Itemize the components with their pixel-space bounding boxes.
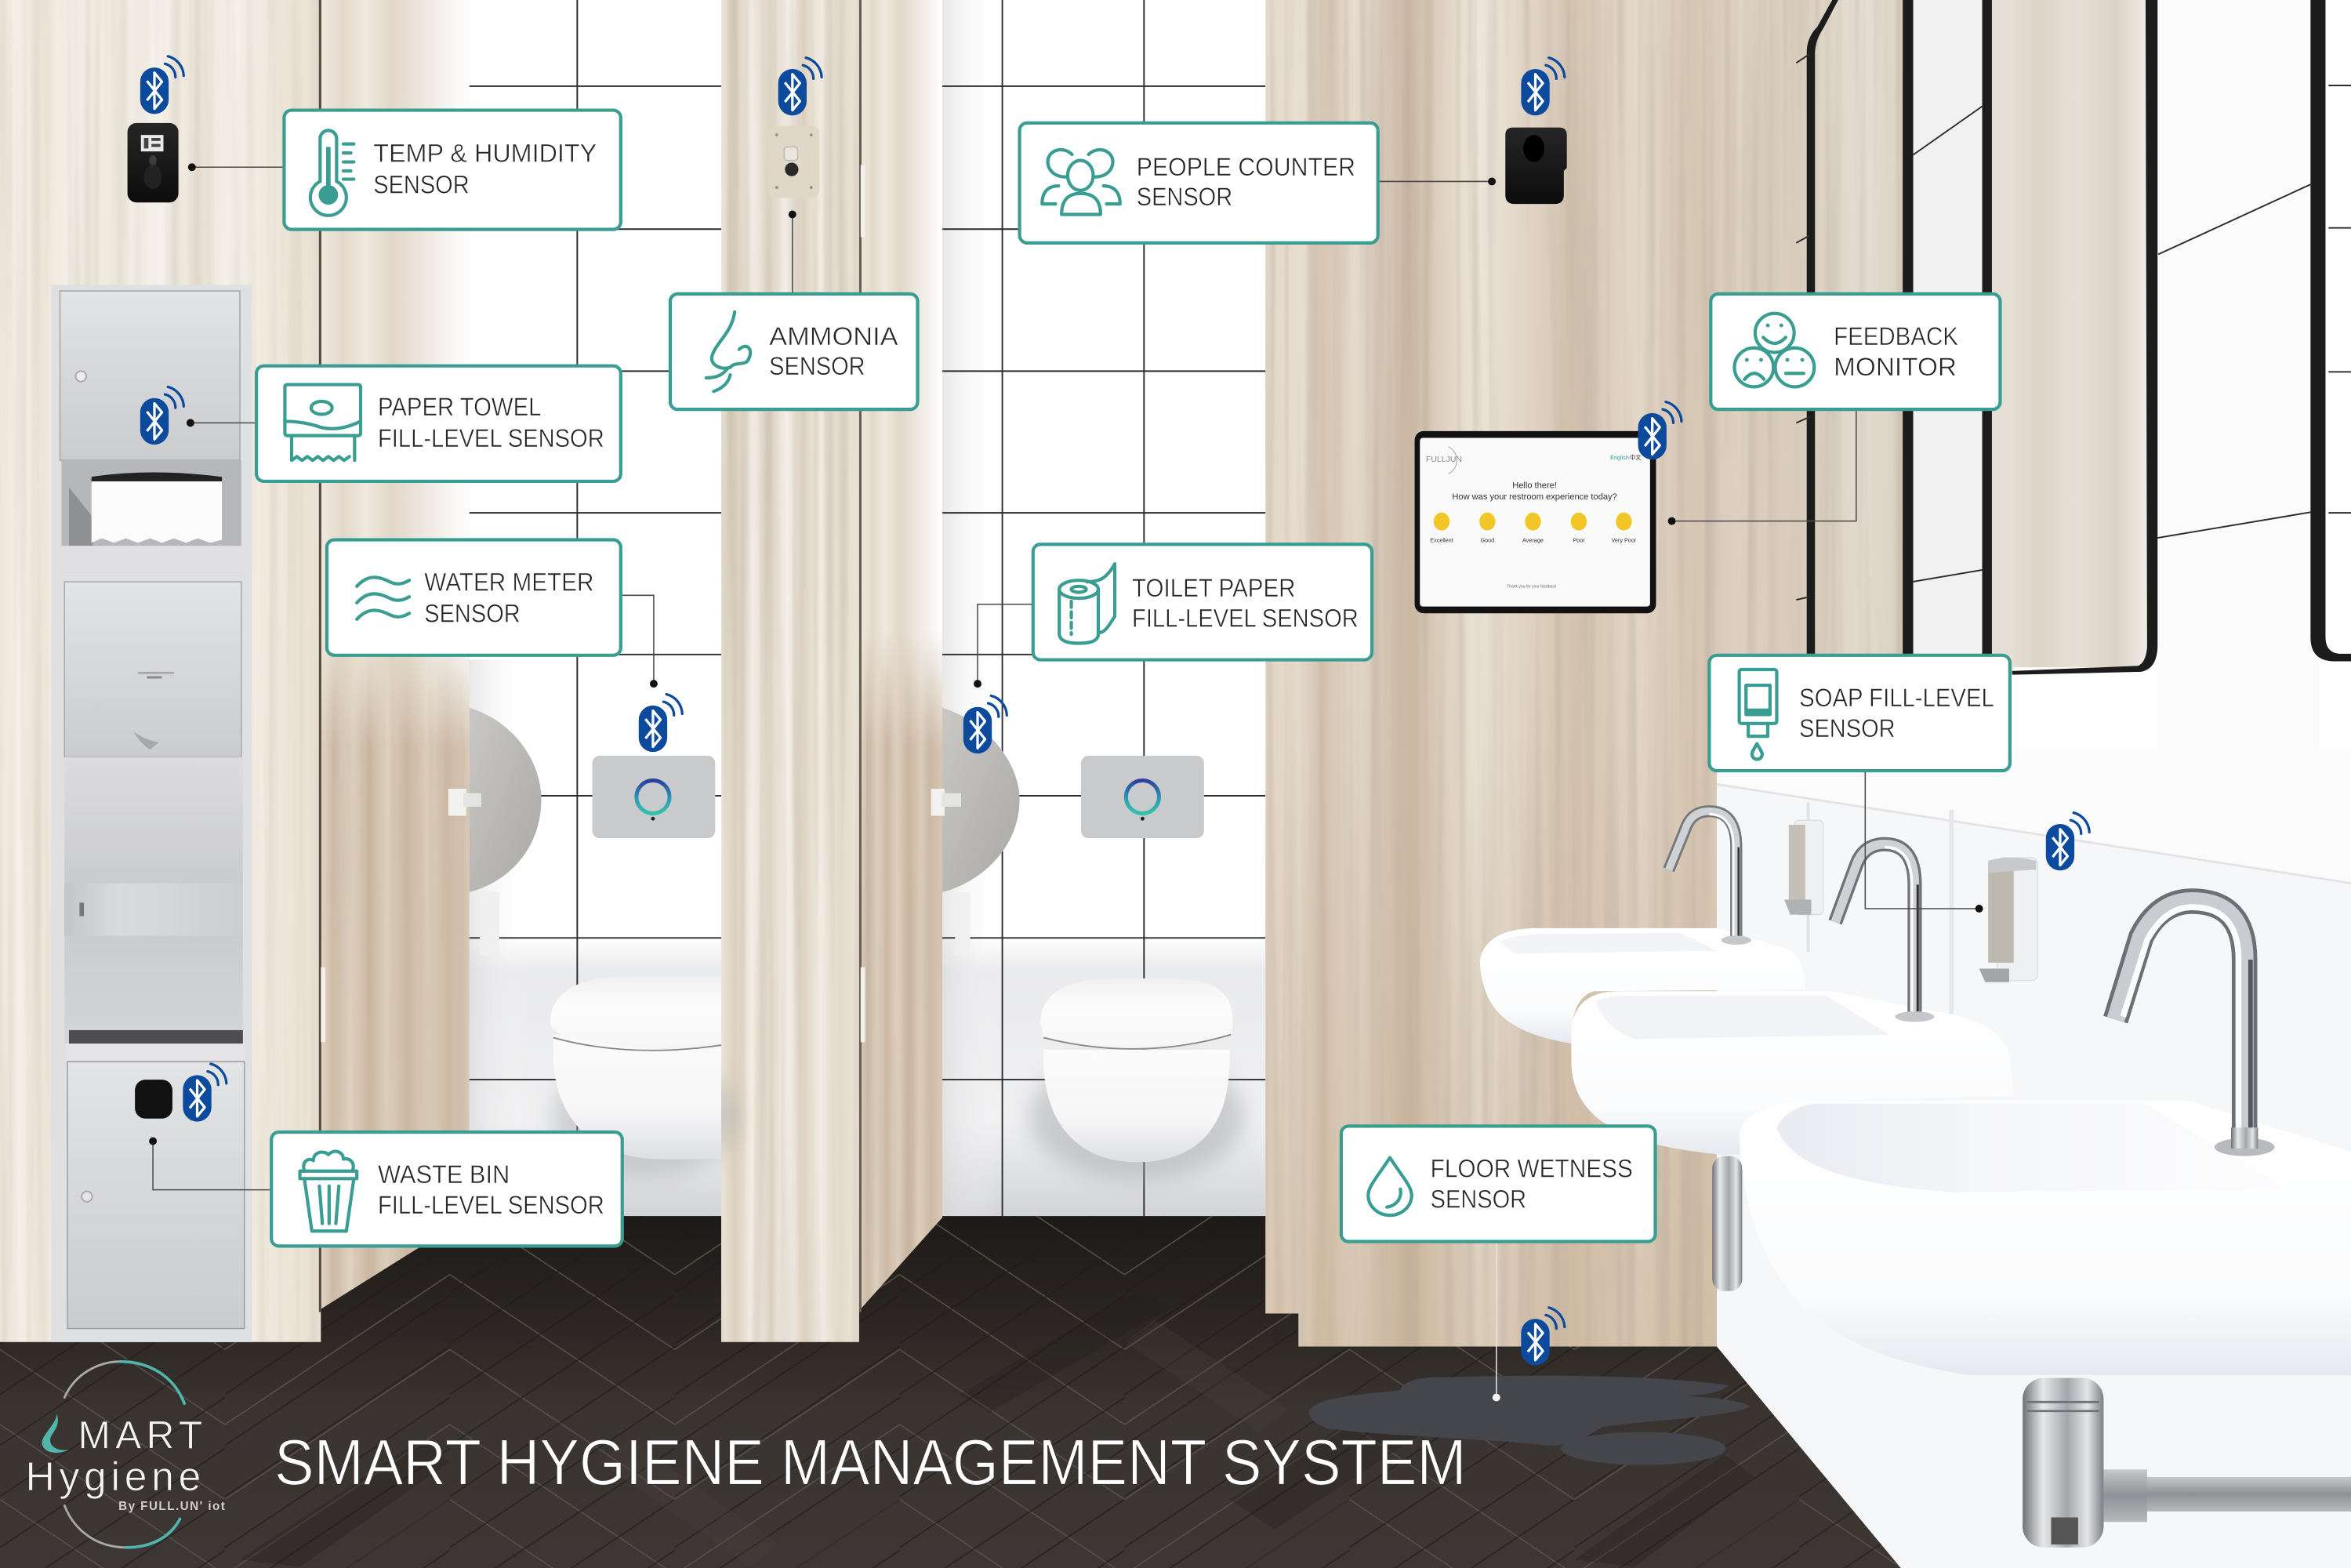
device: waste bin sensor <box>135 1080 172 1119</box>
logo ring <box>64 1362 184 1548</box>
faucet 2 <box>1835 844 1934 1022</box>
soap dispenser 1 <box>1784 820 1823 915</box>
left wood wall <box>0 0 321 1342</box>
device: people counter sensor <box>1505 128 1567 204</box>
soap dispenser 2 <box>1979 858 2037 982</box>
tablet feedback monitor: 中文 <box>1630 454 1642 461</box>
text: feedback monitor: FEEDBACK <box>1834 322 1958 350</box>
label: water meter sensor <box>327 540 621 655</box>
text: soap fill-level <box>1799 684 1994 742</box>
label: toilet paper fill-level sensor <box>1033 544 1372 660</box>
stall door 1 <box>319 0 470 1312</box>
faucet 1 <box>1669 811 1751 945</box>
tablet feedback monitor: Average <box>1522 536 1544 543</box>
text: floor wetness: FLOOR WETNESS <box>1431 1154 1633 1182</box>
icon: three faces <box>1735 314 1814 387</box>
bluetooth icon: temp sensor <box>140 56 183 114</box>
text: waste bin <box>378 1160 604 1219</box>
wall-hung toilet 1 <box>550 976 738 1177</box>
text: waste bin: FILL-LEVEL SENSOR <box>378 1191 604 1219</box>
bluetooth icon: paper towel <box>140 387 183 445</box>
text: soap fill-level: SOAP FILL-LEVEL <box>1799 684 1994 712</box>
tablet feedback monitor: Very Poor <box>1611 536 1637 543</box>
wall-hung toilet 2 <box>1029 978 1244 1180</box>
logo word Hygiene: Hygiene <box>26 1454 201 1499</box>
bluetooth icon: floor wetness <box>1521 1308 1565 1365</box>
bluetooth icon: feedback tablet <box>1638 402 1682 459</box>
icon: paper towel <box>285 385 361 460</box>
icon: water waves <box>357 577 409 619</box>
floor puddle <box>1309 1376 1750 1465</box>
logo byline: By FULL.UN' iot <box>118 1500 225 1513</box>
bluetooth icon: toilet paper <box>963 695 1007 753</box>
text: temp and humidity: SENSOR <box>373 171 470 199</box>
icon: waste bin <box>300 1152 357 1231</box>
white sink wall <box>1717 771 2351 1568</box>
bluetooth icon: waste bin <box>183 1064 227 1122</box>
text: paper towel <box>378 393 604 452</box>
label: ammonia sensor <box>670 294 918 409</box>
label: soap fill-level sensor <box>1709 655 2010 771</box>
label: floor wetness sensor <box>1341 1126 1656 1242</box>
device: temp and humidity sensor <box>128 123 179 202</box>
tablet feedback monitor: Hello there! <box>1512 481 1557 491</box>
icon: toilet paper roll <box>1059 564 1115 644</box>
text: ammonia: AMMONIA <box>769 322 898 350</box>
logo word MART: MART <box>78 1414 202 1457</box>
toilet paper dispenser 1 <box>448 708 541 955</box>
tablet feedback monitor: Excellent <box>1430 536 1453 543</box>
label: waste bin fill-level sensor <box>271 1132 622 1246</box>
sink drain pipe <box>2023 1378 2351 1548</box>
text: toilet paper: TOILET PAPER <box>1132 574 1296 602</box>
logo drop <box>42 1414 69 1453</box>
tablet feedback monitor: FULLJUN <box>1426 455 1462 464</box>
text: waste bin: WASTE BIN <box>378 1160 510 1189</box>
mirrors with black frames <box>1796 0 2351 795</box>
icon: people <box>1042 150 1120 215</box>
bluetooth icon: ammonia sensor <box>778 58 822 115</box>
front faucet <box>2116 901 2274 1156</box>
label: temp and humidity sensor <box>284 111 621 230</box>
tablet feedback monitor <box>1415 431 1656 613</box>
stall door 2 <box>859 0 942 1312</box>
icon: nose <box>706 312 750 391</box>
icon: water drop <box>1368 1158 1412 1215</box>
bluetooth icon: soap <box>2046 813 2089 870</box>
text: soap fill-level: SENSOR <box>1799 714 1896 742</box>
title: SMART HYGIENE MANAGEMENT SYSTEM <box>274 1427 1467 1498</box>
text: floor wetness <box>1431 1154 1633 1214</box>
text: water meter: WATER METER <box>424 568 593 597</box>
tablet feedback monitor: Thank you for your feedback <box>1507 585 1556 590</box>
label: people counter sensor <box>1020 123 1378 243</box>
small drain behind sinks <box>1712 1156 1742 1291</box>
text: paper towel: PAPER TOWEL <box>378 393 541 421</box>
tablet feedback monitor: Good <box>1480 536 1494 543</box>
text: toilet paper: FILL-LEVEL SENSOR <box>1132 604 1359 632</box>
device: ammonia sensor <box>768 126 819 198</box>
text: people counter: PEOPLE COUNTER <box>1137 153 1355 181</box>
right wood wall <box>1265 0 1907 1347</box>
text: temp and humidity: TEMP & HUMIDITY <box>373 140 597 168</box>
back sink <box>1480 928 1805 1044</box>
text: paper towel: FILL-LEVEL SENSOR <box>378 424 604 452</box>
connector lines and dots <box>149 163 1983 1402</box>
paper towel and waste cabinet <box>51 285 252 1342</box>
icon: thermometer <box>310 130 354 216</box>
text: water meter <box>424 568 593 628</box>
stall partition panel <box>721 0 859 1342</box>
tablet feedback monitor: English <box>1610 454 1629 461</box>
text: floor wetness: SENSOR <box>1431 1185 1526 1214</box>
text: temp and humidity <box>373 140 597 199</box>
tablet feedback monitor: Poor <box>1573 536 1585 543</box>
icon: soap dispenser <box>1740 670 1776 760</box>
label: feedback monitor <box>1711 294 2000 409</box>
logo: Smart Hygiene <box>26 1362 225 1548</box>
flush plate 2 <box>1081 756 1204 838</box>
text: people counter <box>1137 153 1355 211</box>
middle sink <box>1571 991 2014 1155</box>
bluetooth icon: people counter <box>1521 58 1565 115</box>
text: feedback monitor <box>1834 322 1958 381</box>
tablet feedback monitor: How was your restroom experience today? <box>1452 492 1617 502</box>
text: people counter: SENSOR <box>1137 183 1232 211</box>
text: water meter: SENSOR <box>424 600 521 628</box>
text: feedback monitor: MONITOR <box>1834 353 1957 381</box>
text: ammonia <box>769 322 898 380</box>
front sink <box>1740 1101 2351 1375</box>
bluetooth icon: water meter <box>639 695 682 752</box>
label: paper towel fill-level sensor <box>256 366 621 481</box>
flush plate 1 <box>592 756 715 838</box>
text: ammonia: SENSOR <box>769 352 865 380</box>
text: toilet paper <box>1132 574 1359 632</box>
toilet paper dispenser 2 <box>931 708 1020 955</box>
dark herringbone floor <box>0 1216 2351 1568</box>
